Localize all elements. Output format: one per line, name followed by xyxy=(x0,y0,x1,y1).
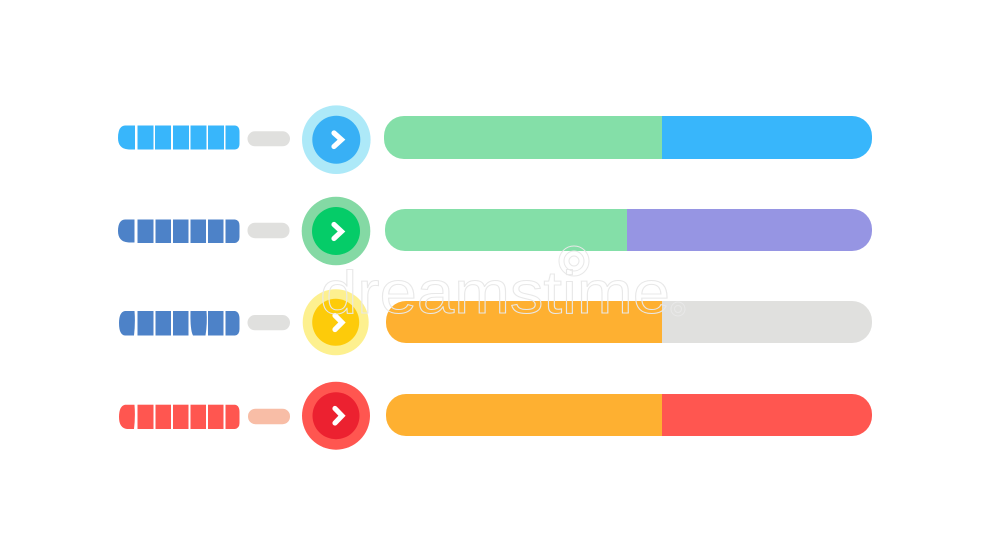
row 4 peach pill xyxy=(248,409,290,424)
row 1 grey pill xyxy=(248,131,290,146)
row 4 arrow icon xyxy=(302,382,370,450)
row 1 segmented label xyxy=(118,126,240,150)
row 1 xyxy=(118,105,872,174)
row 4 xyxy=(119,382,872,450)
row 2 arrow icon xyxy=(302,197,370,265)
watermark wordmark: dreamstime xyxy=(320,259,670,326)
row 2 segmented label xyxy=(118,220,240,243)
infographic canvas xyxy=(118,105,872,450)
row 3 xyxy=(119,289,872,355)
row 2 progress bar xyxy=(385,209,872,251)
watermark small logo xyxy=(671,302,685,316)
row 4 segmented label xyxy=(119,405,240,429)
watermark spiral logo xyxy=(559,246,589,276)
row 1 arrow icon xyxy=(302,105,371,174)
watermark xyxy=(320,246,685,326)
row 3 progress bar xyxy=(386,301,872,343)
row 3 segmented label xyxy=(119,311,240,336)
row 1 progress bar xyxy=(384,116,872,159)
row 3 arrow icon xyxy=(303,289,369,355)
row 4 progress bar xyxy=(386,394,872,436)
row 2 xyxy=(118,197,872,265)
row 3 grey pill xyxy=(248,315,290,330)
row 2 grey pill xyxy=(248,223,290,238)
